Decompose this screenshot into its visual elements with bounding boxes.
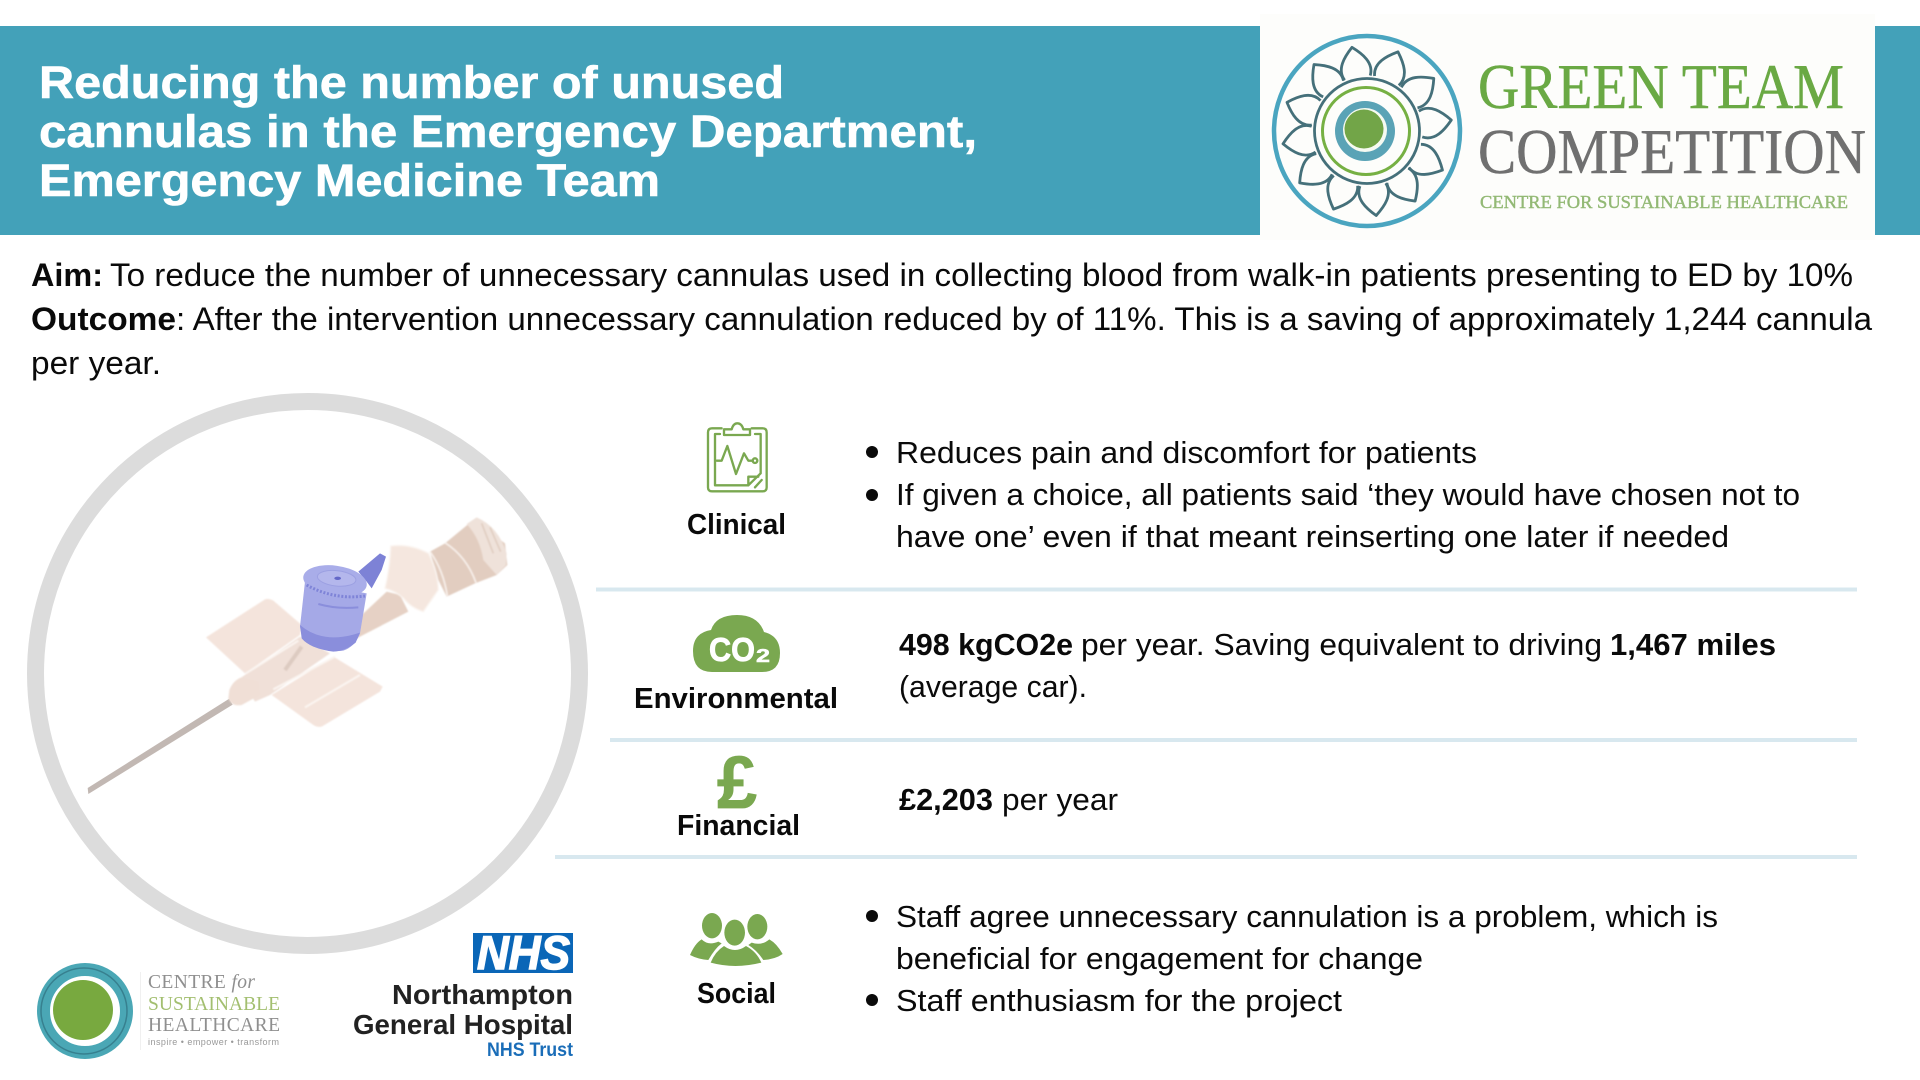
logo: NHS Northampton General Hospital: NHS Trust <box>487 1040 574 1061</box>
logo mark <box>41 968 127 1054</box>
logo wordmark: CENTRE for <box>148 972 255 993</box>
label: Financial <box>677 810 800 842</box>
social bullets: Staff agree unnecessary cannulation is a problem, which is <box>896 899 1718 934</box>
financial text: £2,203 <box>899 782 993 817</box>
social bullets: beneficial for engagement for change <box>896 941 1423 976</box>
icon: CO2 cloud: 2 <box>756 646 770 666</box>
fin <box>385 545 438 612</box>
icon: CO2 cloud <box>693 615 780 672</box>
logo wordmark: HEALTHCARE <box>148 1015 280 1036</box>
title: Emergency Medicine Team <box>39 155 660 206</box>
logo wordmark: CENTRE FOR SUSTAINABLE HEALTHCARE <box>1480 192 1848 212</box>
emblem: sun mandala <box>1274 36 1460 226</box>
social bullets <box>866 899 1718 1018</box>
icon: people <box>690 913 783 966</box>
logo wordmark: COMPETITION <box>1478 116 1866 187</box>
wing centre <box>240 637 330 702</box>
blue port band <box>300 625 360 652</box>
cannula illustration <box>88 517 507 794</box>
environmental text: (average car). <box>899 669 1087 704</box>
row: clinical <box>687 423 786 541</box>
aim and outcome text: per year. <box>31 345 161 381</box>
header band <box>0 26 1920 235</box>
environmental text: 1,467 miles <box>1610 627 1776 662</box>
row: social <box>690 913 783 1010</box>
logo wordmark: GREEN TEAM <box>1478 51 1844 122</box>
logo: NHS Northampton General Hospital <box>353 926 574 1061</box>
label: Social <box>697 978 776 1010</box>
logo: NHS Northampton General Hospital: General Hospital <box>353 1009 573 1040</box>
logo: Centre for Sustainable Healthcare <box>41 968 280 1054</box>
rear chamber <box>430 520 507 597</box>
label: Clinical <box>687 509 786 541</box>
clinical bullets: Reduces pain and discomfort for patients <box>896 435 1477 470</box>
blue port top <box>301 561 369 601</box>
logo: NHS Northampton General Hospital: NHS <box>477 926 570 979</box>
pale parts <box>206 517 507 727</box>
logo: Green Team Competition <box>1260 14 1875 240</box>
cap <box>467 517 507 575</box>
icon: CO2 cloud: CO <box>709 631 755 668</box>
environmental text <box>899 627 1776 704</box>
blue tab <box>358 553 386 588</box>
row: financial <box>677 741 800 842</box>
logo wordmark: inspire • empower • transform <box>148 1037 279 1047</box>
circle frame <box>36 402 580 946</box>
financial text <box>899 782 1118 817</box>
aim and outcome text: To reduce the number of unnecessary cannulas used in collecting blood from walk-in patients presenting to ED by 10% <box>110 257 1853 293</box>
clinical bullets <box>866 435 1800 554</box>
icon: pound sign: £ <box>717 741 757 824</box>
aim and outcome text: Aim: <box>31 257 103 293</box>
title <box>39 57 977 206</box>
row: environmental <box>634 615 838 715</box>
icon: clipboard <box>708 423 767 491</box>
logo wordmark: SUSTAINABLE <box>148 994 280 1015</box>
social bullets: Staff enthusiasm for the project <box>896 983 1342 1018</box>
aim and outcome text: Outcome <box>31 301 176 337</box>
logo wordmark <box>148 972 280 1047</box>
tube <box>357 592 408 638</box>
logo: NHS Northampton General Hospital: Northampton <box>392 979 573 1010</box>
blue port body <box>300 582 367 651</box>
needle <box>88 699 233 794</box>
clinical bullets: If given a choice, all patients said ‘they would have chosen not to <box>896 477 1800 512</box>
title: cannulas in the Emergency Department, <box>39 106 977 157</box>
aim and outcome text <box>31 257 1872 381</box>
label: Environmental <box>634 683 838 715</box>
wings <box>206 599 302 673</box>
financial text: per year <box>1002 782 1118 817</box>
aim and outcome text: : After the intervention unnecessary cannulation reduced by of 11%. This is a saving of approximately 1,244 cannula <box>176 301 1872 337</box>
hub tip <box>228 677 260 705</box>
environmental text: 498 kgCO2e <box>899 627 1073 662</box>
environmental text: per year. Saving equivalent to driving <box>1081 627 1602 662</box>
logo wordmark <box>1478 51 1866 212</box>
clinical bullets: have one’ even if that meant reinserting one later if needed <box>896 519 1729 554</box>
title: Reducing the number of unused <box>39 57 784 108</box>
